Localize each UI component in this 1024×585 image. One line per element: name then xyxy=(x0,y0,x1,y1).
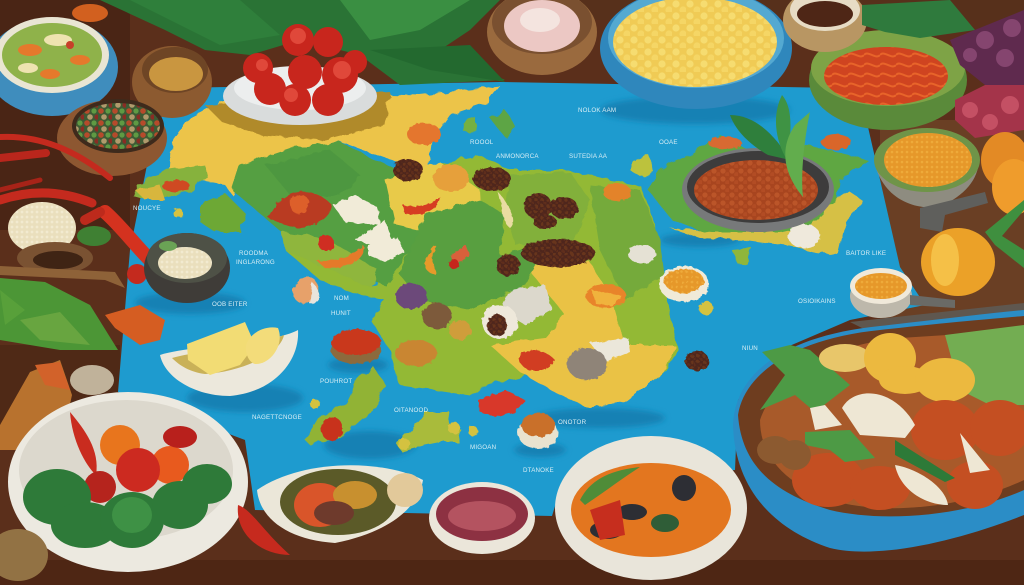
wooden spoon xyxy=(0,242,147,288)
sauce dish top xyxy=(783,0,867,52)
veg spears xyxy=(425,245,470,275)
land: eastern island xyxy=(648,135,868,240)
left greens xyxy=(0,278,118,350)
map labels: BAITOR LIKE xyxy=(846,250,886,257)
land: northern isles xyxy=(490,110,517,137)
stew brown chunks xyxy=(757,436,811,470)
map labels: INGLARONG xyxy=(236,259,275,266)
map labels: ROODMA xyxy=(239,250,269,257)
garlic clove xyxy=(293,276,319,304)
map land xyxy=(132,86,868,452)
stew base xyxy=(760,330,1024,508)
map labels: SUTEDIA AA xyxy=(569,153,608,160)
tomato plate xyxy=(223,24,377,125)
map sea xyxy=(118,82,925,516)
tomatoes xyxy=(243,24,367,116)
map labels: ANMONORCA xyxy=(496,153,539,160)
lemon bowl xyxy=(160,322,298,396)
ivory horn xyxy=(498,192,513,228)
white garlic xyxy=(333,195,404,262)
brown spice mounds xyxy=(393,159,595,276)
land: ochre shadow under plate xyxy=(205,92,390,140)
stew green strips xyxy=(805,430,955,482)
land: green region xyxy=(232,142,425,285)
spice heaps on south land xyxy=(395,338,630,380)
yellow dots xyxy=(173,208,713,450)
spice plate xyxy=(331,329,381,364)
map labels: NIUN xyxy=(742,345,758,352)
red chilis left xyxy=(0,137,150,260)
red on isle xyxy=(321,417,343,441)
map labels: NOUCYE xyxy=(133,205,161,212)
map labels: POUHROT xyxy=(320,378,352,385)
chili slice and tomato xyxy=(316,235,364,268)
red island flakes xyxy=(478,390,525,417)
map labels: NAGETTCNOGE xyxy=(252,414,302,421)
mortar of rice xyxy=(144,233,230,303)
corn bowl xyxy=(600,0,792,109)
bean bowl xyxy=(57,99,167,176)
orange leaf top left xyxy=(72,4,108,22)
spice dish right xyxy=(659,266,709,302)
small dish south xyxy=(518,413,558,449)
map labels: NOLOK AAM xyxy=(578,107,616,114)
grapes xyxy=(950,10,1024,138)
green noodle bowl xyxy=(809,30,967,130)
land: western island xyxy=(132,165,208,200)
bread board xyxy=(0,360,114,450)
land: northern yellow coast xyxy=(170,86,500,195)
map labels: NOM xyxy=(334,295,349,302)
chili and tomato xyxy=(70,412,197,503)
map labels: DTANOKE xyxy=(523,467,554,474)
purple and brown rounds xyxy=(395,283,471,340)
map labels: OOAE xyxy=(659,139,678,146)
map labels: OITANOOD xyxy=(394,407,428,414)
stew yellow chunks xyxy=(819,333,975,402)
greens right edge xyxy=(985,200,1024,268)
yellow spice bowl xyxy=(874,128,988,232)
dark round spice xyxy=(685,351,709,371)
pan of brown mince xyxy=(682,95,834,232)
potato xyxy=(0,529,48,581)
large stew bowl xyxy=(733,303,1024,552)
leaf cluster xyxy=(730,95,810,197)
salad bowl xyxy=(0,17,118,116)
beet sauce bowl xyxy=(429,482,535,554)
white dollop xyxy=(788,224,820,248)
onion bowl xyxy=(487,0,597,75)
garlic top right xyxy=(628,245,656,263)
stew greens xyxy=(760,325,1024,412)
rice heap xyxy=(8,202,111,254)
orange spice left xyxy=(105,305,165,345)
land: southern islands xyxy=(305,367,385,445)
pumpkin xyxy=(981,132,1024,215)
red pepper slice xyxy=(403,197,440,214)
map labels: ONOTOR xyxy=(558,419,587,426)
white veg bowl xyxy=(8,392,248,572)
stew white chunks xyxy=(810,393,990,505)
orange flowers xyxy=(162,123,851,308)
small tan bowl xyxy=(132,46,212,118)
gravy boat xyxy=(257,465,423,543)
land: small west peninsula xyxy=(200,193,247,232)
garlic sack xyxy=(482,285,552,339)
spice cup xyxy=(850,268,955,318)
dried chili pile xyxy=(268,192,332,228)
top greens xyxy=(100,0,505,85)
map labels: ROOOL xyxy=(470,139,494,146)
land: yellow plains xyxy=(385,162,482,235)
map labels: MIGOAN xyxy=(470,444,496,451)
food on map xyxy=(162,123,851,450)
curry bowl xyxy=(555,436,747,580)
land: central mass xyxy=(285,155,678,408)
map labels: HUNIT xyxy=(331,310,351,317)
map labels xyxy=(133,107,886,474)
juice glass xyxy=(921,228,995,296)
fallen chili xyxy=(238,505,290,555)
stew meat chunks xyxy=(792,400,1024,510)
green peppers xyxy=(23,464,232,548)
map labels: OSIOIKAINS xyxy=(798,298,836,305)
top right leaves xyxy=(862,0,975,38)
map labels: OOB EITER xyxy=(212,301,248,308)
land: green interior xyxy=(400,200,545,310)
sea shadows xyxy=(135,96,790,459)
